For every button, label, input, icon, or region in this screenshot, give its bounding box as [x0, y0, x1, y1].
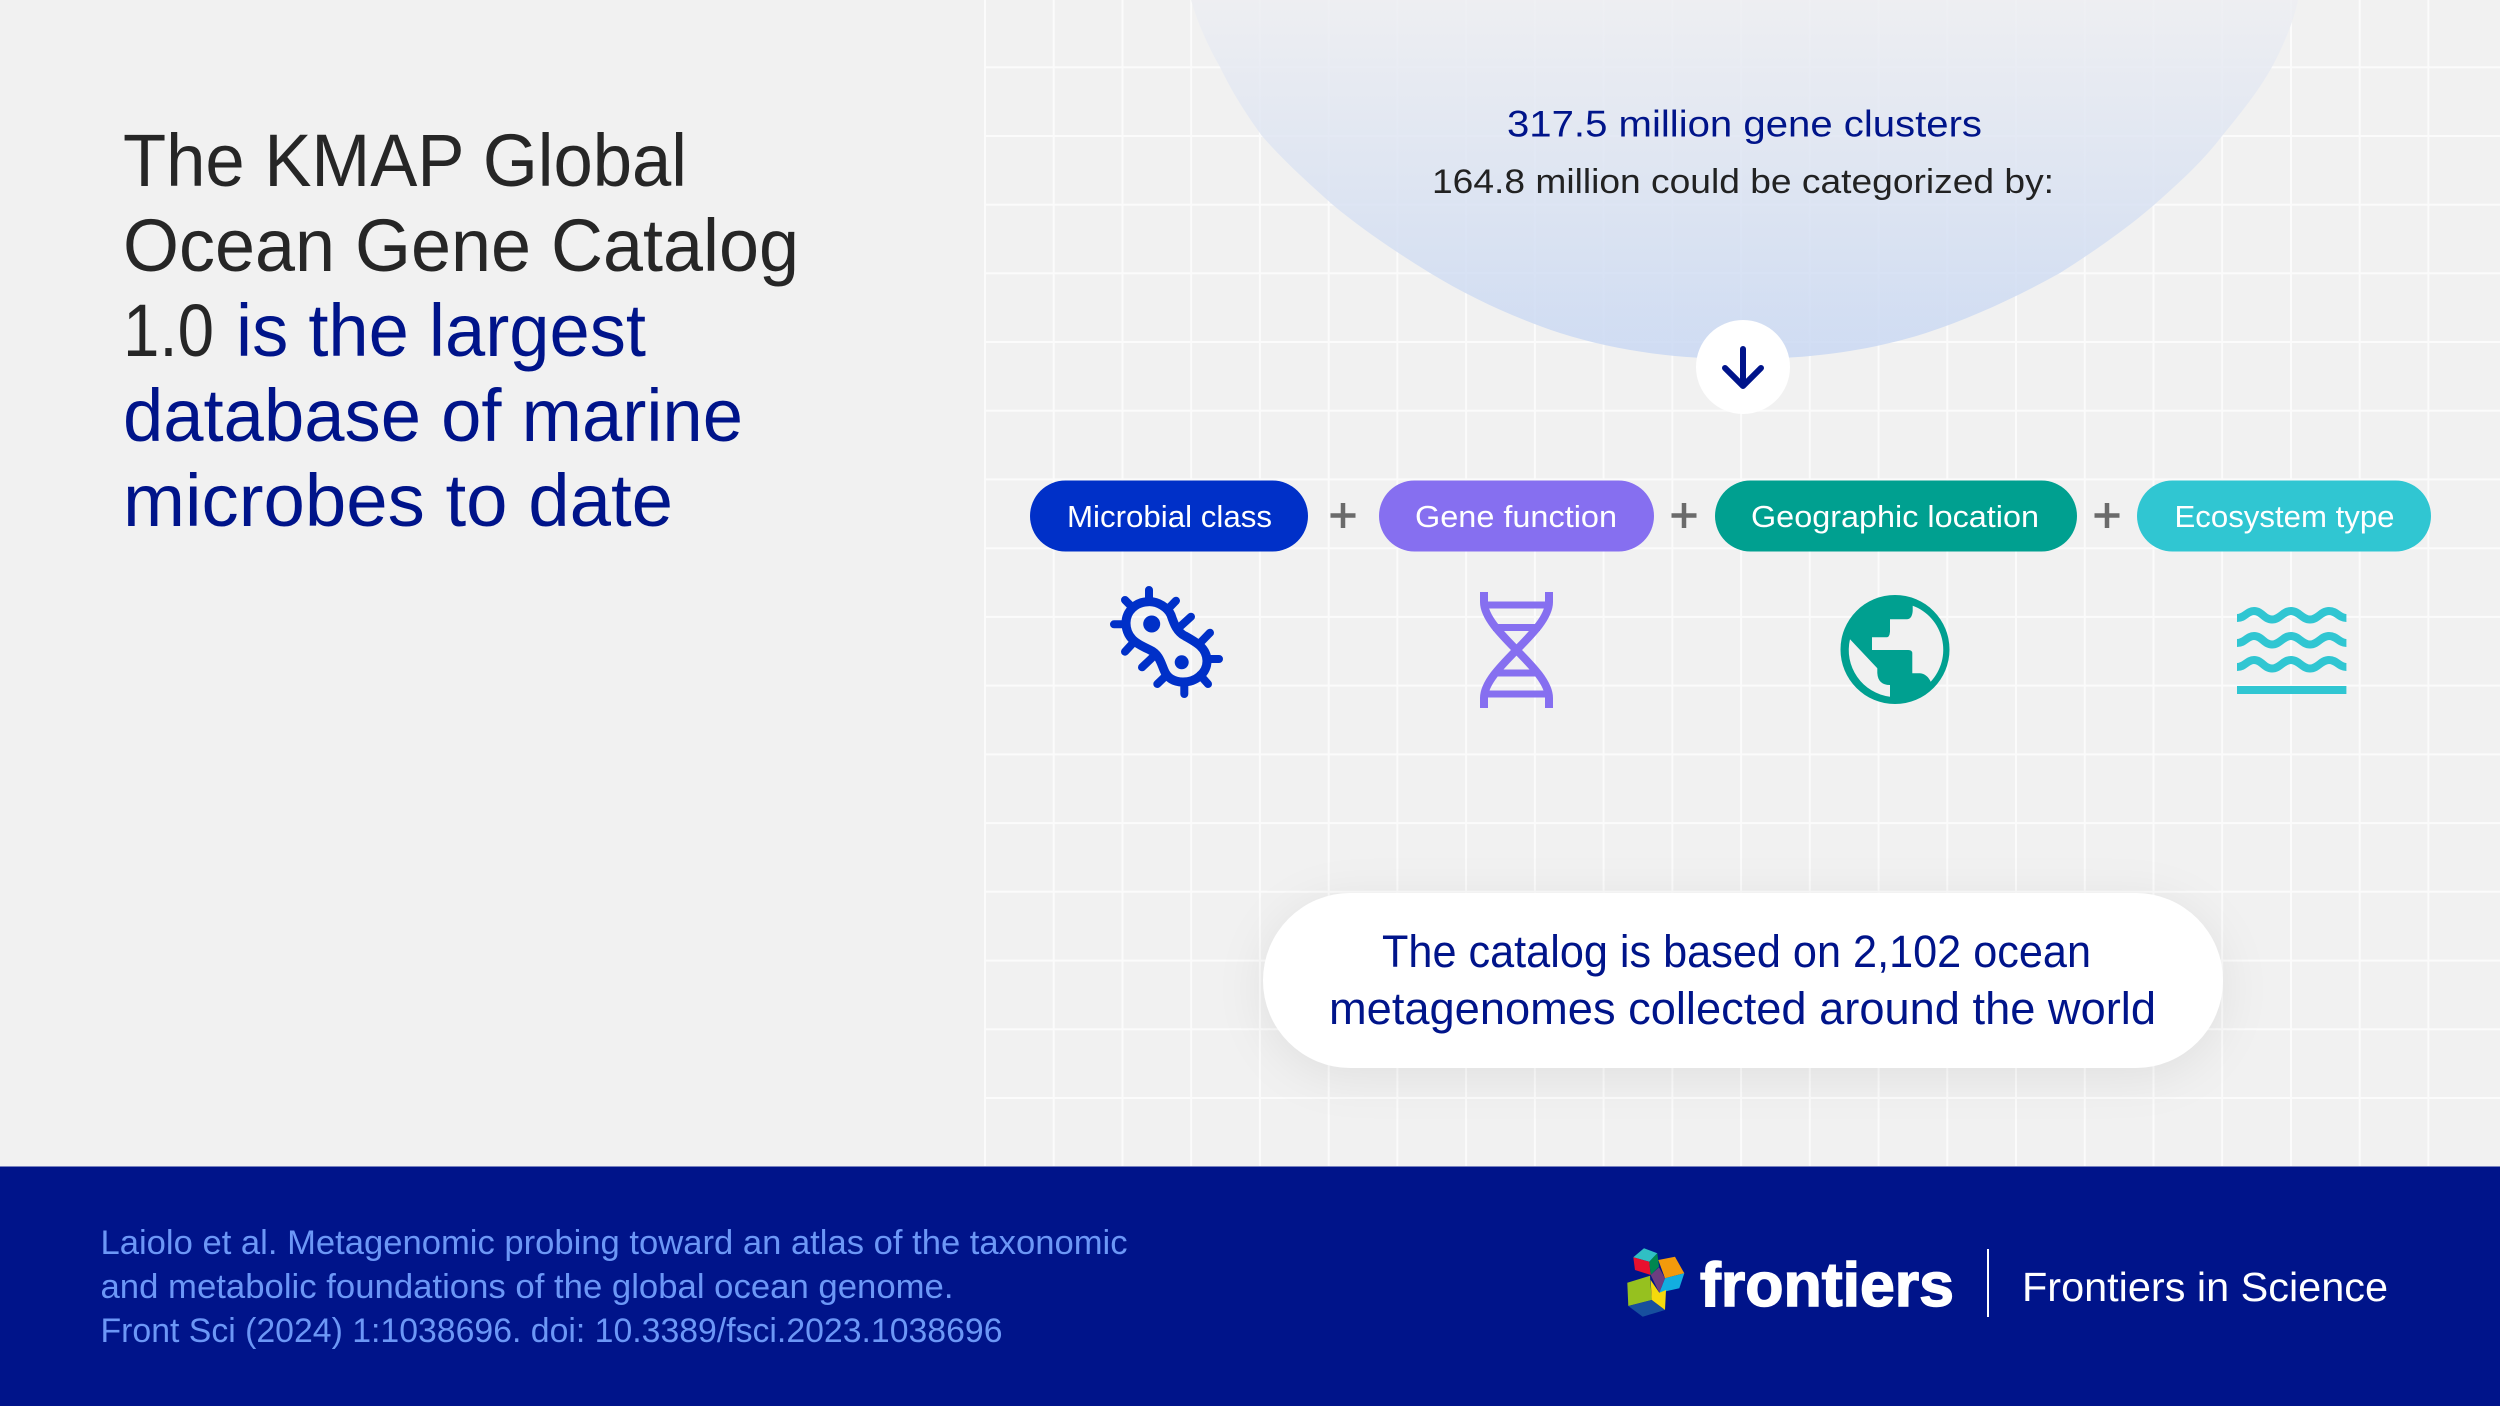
citation: and metabolic foundations of the global ocean genome.	[100, 1268, 954, 1306]
heading: Ocean Gene Catalog	[123, 204, 799, 287]
pill: ecosystem type	[2137, 480, 2431, 552]
pill: ecosystem type: Ecosystem type	[2174, 499, 2394, 534]
heading: 1.0	[123, 289, 214, 372]
journal name: Frontiers in Science	[2022, 1264, 2388, 1310]
pill: geographic location: Geographic location	[1751, 499, 2039, 534]
arrow badge	[1696, 320, 1790, 414]
text: gene cluster count: 317.5 million gene clusters	[1507, 104, 1982, 144]
plus sign	[1330, 503, 1356, 528]
heading: is the largest	[236, 289, 646, 372]
icon: bacterium	[1114, 590, 1219, 694]
footer band	[0, 1166, 2500, 1406]
heading: microbes to date	[123, 459, 673, 542]
heading: The KMAP Global	[123, 119, 687, 202]
pill: gene function: Gene function	[1415, 499, 1617, 534]
pill: gene function	[1379, 480, 1654, 552]
pill: microbial class: Microbial class	[1067, 499, 1272, 534]
heading: database of marine	[123, 374, 743, 457]
pill: geographic location	[1715, 480, 2077, 552]
divider	[1987, 1249, 1989, 1317]
icon: DNA helix	[1484, 592, 1549, 708]
logo: frontiers wordmark: frontiers	[1700, 1251, 1954, 1320]
callout: The catalog is based on 2,102 ocean	[1382, 926, 2091, 977]
dome: gene cluster semicircle	[1191, 0, 2298, 359]
citation: Front Sci (2024) 1:1038696. doi: 10.3389/fsci.2023.1038696	[100, 1312, 1002, 1350]
callout	[1263, 893, 2223, 1068]
icon: waves	[2237, 611, 2346, 694]
text: categorized count: 164.8 million could be categorized by:	[1432, 163, 2054, 201]
plus sign	[1672, 503, 1696, 528]
icon: globe	[1840, 595, 1950, 704]
callout: metagenomes collected around the world	[1329, 983, 2156, 1034]
logo: frontiers mark	[1627, 1248, 1684, 1317]
citation: Laiolo et al. Metagenomic probing toward an atlas of the taxonomic	[100, 1224, 1128, 1262]
heading	[123, 119, 799, 542]
plus sign	[2094, 503, 2120, 528]
pill: microbial class	[1030, 480, 1308, 552]
citation	[100, 1224, 1128, 1350]
